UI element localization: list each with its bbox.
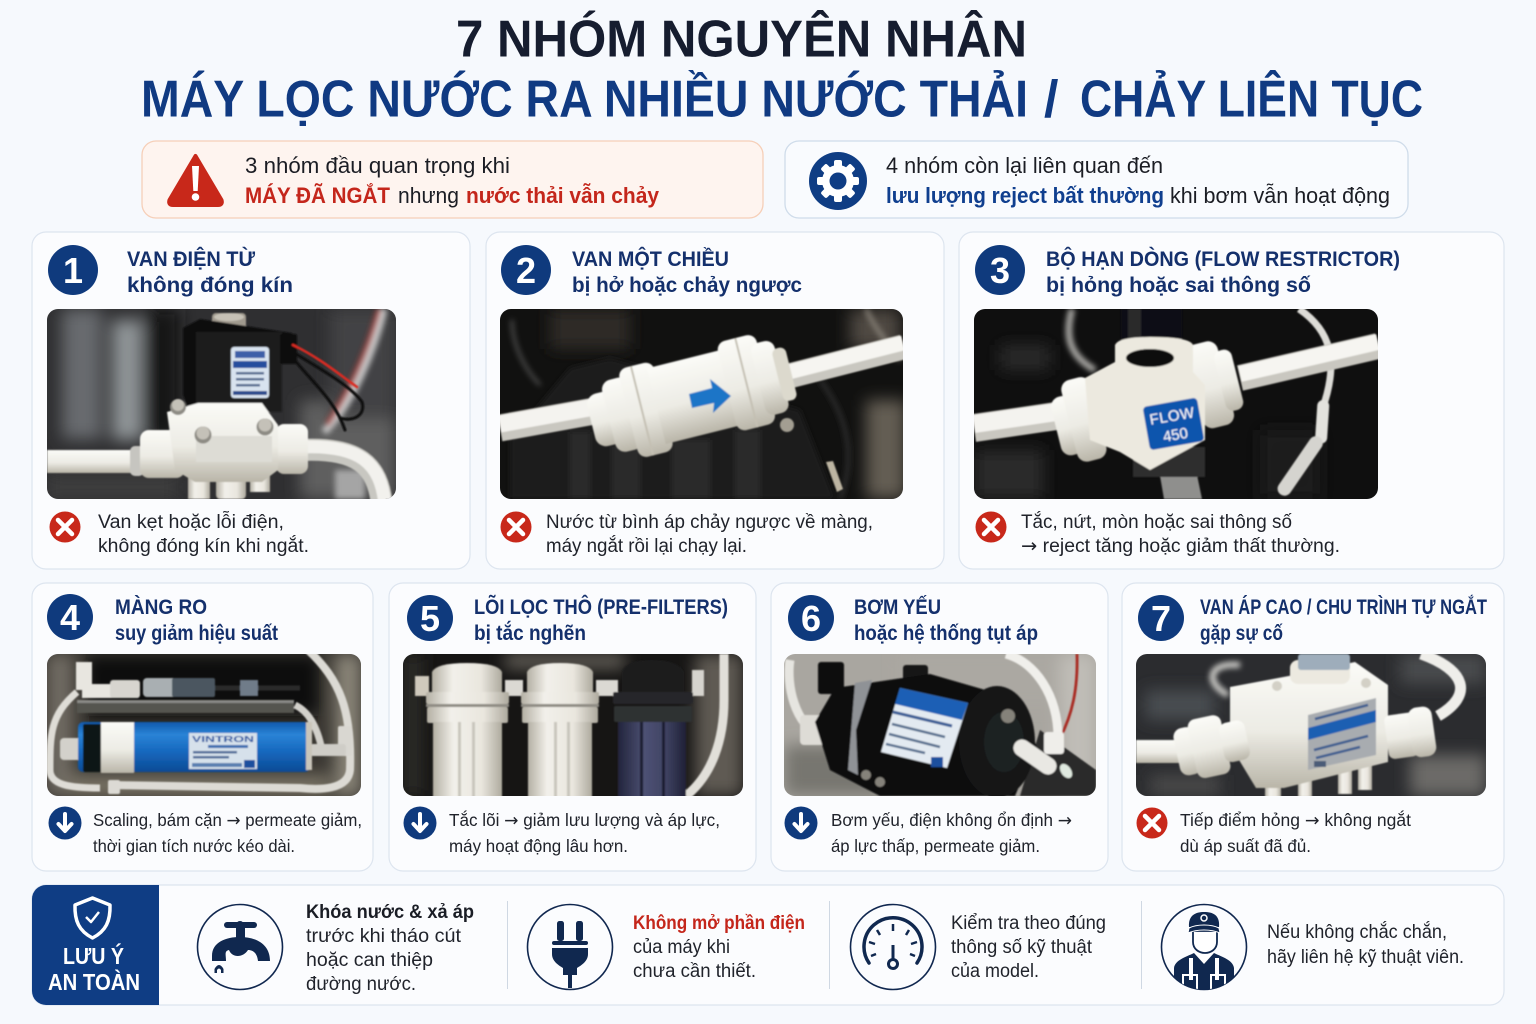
number badge 3: 3 (990, 250, 1010, 291)
heading 6: hoặc hệ thống tụt áp (854, 622, 1038, 645)
photo: check valve (500, 309, 906, 499)
heading 2 (572, 247, 802, 297)
icon: warning triangle (169, 156, 222, 205)
panel: cause 3 (959, 232, 1504, 569)
panel: cause 6 (771, 583, 1108, 871)
panel: cause 2 (486, 232, 944, 569)
description 3: → reject tăng hoặc giảm thất thường. (1021, 535, 1340, 557)
description 3: Tắc, nứt, mòn hoặc sai thông số (1021, 511, 1292, 533)
panel: cause 5 (389, 583, 756, 871)
safety note 4: Nếu không chắc chắn, (1267, 921, 1447, 943)
number badge 4 (47, 594, 93, 640)
description 6: áp lực thấp, permeate giảm. (831, 836, 1040, 856)
number badge 6 (788, 595, 834, 641)
safety note 1 (306, 902, 474, 995)
heading 3: BỘ HẠN DÒNG (FLOW RESTRICTOR) (1046, 247, 1400, 271)
safety note 3: Kiểm tra theo đúng (951, 913, 1106, 934)
title: MÁY LỌC NƯỚC RA NHIỀU NƯỚC THẢI (141, 70, 1028, 128)
description 3 (1021, 511, 1340, 557)
safety note 4: hãy liên hệ kỹ thuật viên. (1267, 947, 1464, 968)
heading 3: bị hỏng hoặc sai thông số (1046, 274, 1311, 297)
number badge 2: 2 (516, 250, 536, 291)
icon: down arrow (404, 806, 436, 840)
number badge 4: 4 (60, 597, 80, 638)
description 2 (546, 512, 873, 557)
safety note 3 (951, 913, 1106, 982)
heading 4: suy giảm hiệu suất (115, 622, 278, 645)
description 5: máy hoạt động lâu hơn. (449, 836, 628, 856)
callout text: 4 nhóm còn lại liên quan đến (886, 153, 1163, 178)
icon: gear (809, 152, 867, 210)
description 7: dù áp suất đã đủ. (1180, 836, 1311, 856)
panel: cause 4 (32, 583, 373, 871)
heading 1: không đóng kín (127, 274, 293, 297)
panel: cause 7 (1122, 583, 1504, 871)
title: 7 NHÓM NGUYÊN NHÂN (456, 10, 1027, 68)
icon: red cross (500, 512, 532, 542)
icon: gauge (850, 904, 936, 990)
description 6: Bơm yếu, điện không ổn định → (831, 810, 1072, 831)
number badge 5: 5 (420, 598, 440, 639)
number badge 2 (501, 245, 551, 295)
safety note 3: thông số kỹ thuật (951, 937, 1093, 958)
callout: remaining 4 groups (785, 141, 1408, 218)
number badge 5 (407, 595, 453, 641)
description 4 (93, 810, 362, 856)
icon: down arrow (784, 806, 818, 840)
safety note 3: của model. (951, 961, 1039, 982)
photo: flow restrictor: 450 (1162, 425, 1189, 446)
callout text: nhưng (398, 183, 459, 208)
number badge 1 (48, 245, 98, 295)
title (141, 10, 1423, 128)
heading 5: bị tắc nghẽn (474, 621, 586, 645)
safety note 1: hoặc can thiệp (306, 950, 433, 971)
icon: water tap (198, 904, 282, 990)
safety note 1: Khóa nước & xả áp (306, 902, 474, 923)
icon: shield (75, 898, 110, 938)
safety label text: LƯU Ý (63, 942, 124, 969)
title: / (1044, 70, 1058, 128)
photo: solenoid valve (47, 309, 396, 505)
safety note 2: chưa cần thiết. (633, 961, 756, 982)
icon: technician (1162, 904, 1246, 995)
heading 1 (127, 247, 293, 297)
heading 2: VAN MỘT CHIỀU (572, 247, 729, 271)
heading 6 (854, 596, 1038, 645)
heading 5: LÕI LỌC THÔ (PRE-FILTERS) (474, 595, 728, 619)
panel: cause 1 (32, 232, 470, 569)
description 1: không đóng kín khi ngắt. (98, 535, 309, 557)
callout text (245, 153, 660, 208)
heading 6: BƠM YẾU (854, 596, 941, 619)
photo: flow restrictor: FLOW (1148, 404, 1196, 429)
icon: red cross (1136, 808, 1168, 838)
description 6 (831, 810, 1072, 856)
safety note 1: đường nước. (306, 974, 416, 995)
number badge 7 (1138, 595, 1184, 641)
title: CHẢY LIÊN TỤC (1080, 70, 1423, 128)
photo: booster pump (784, 654, 1096, 798)
description 1 (98, 511, 309, 557)
callout text: khi bơm vẫn hoạt động (1170, 183, 1390, 208)
photo: RO membrane: VINTRON (192, 734, 254, 744)
icon: red cross (50, 512, 80, 542)
description 5: Tắc lõi → giảm lưu lượng và áp lực, (449, 809, 720, 831)
number badge 1: 1 (63, 250, 83, 291)
number badge 3 (975, 245, 1025, 295)
heading 1: VAN ĐIỆN TỪ (127, 247, 256, 271)
safety note 1: trước khi tháo cút (306, 926, 462, 947)
callout text: nước thải vẫn chảy (466, 183, 660, 208)
icon: plug (528, 904, 612, 990)
safety label text: AN TOÀN (48, 968, 140, 995)
description 4: thời gian tích nước kéo dài. (93, 836, 295, 856)
safety note 2: của máy khi (633, 937, 730, 958)
number badge 7: 7 (1151, 598, 1171, 639)
heading 4: MÀNG RO (115, 596, 207, 619)
callout: first 3 groups (142, 141, 763, 218)
safety note 2: Không mở phần điện (633, 913, 805, 934)
callout text: MÁY ĐÃ NGẮT (245, 183, 391, 208)
panel: safety notes (32, 885, 1504, 1005)
heading 2: bị hở hoặc chảy ngược (572, 274, 802, 297)
description 7: Tiếp điểm hỏng → không ngắt (1180, 809, 1411, 831)
description 1: Van kẹt hoặc lỗi điện, (98, 511, 284, 533)
description 2: Nước từ bình áp chảy ngược về màng, (546, 512, 873, 533)
heading 5 (474, 595, 728, 645)
callout text: 3 nhóm đầu quan trọng khi (245, 153, 510, 178)
callout text (886, 153, 1390, 208)
description 7 (1180, 809, 1411, 856)
callout text: lưu lượng reject bất thường (886, 183, 1164, 208)
photo: high-pressure switch (1136, 654, 1486, 799)
safety note 2 (633, 913, 805, 982)
heading 4 (115, 596, 278, 645)
safety label block (32, 885, 159, 1005)
description 4: Scaling, bám cặn → permeate giảm, (93, 810, 362, 831)
icon: red cross (976, 512, 1006, 542)
photo: pre-filter housings (403, 654, 743, 802)
photo: RO membrane (47, 650, 361, 796)
photo: flow restrictor (974, 309, 1378, 499)
heading 7 (1200, 595, 1487, 645)
icon: down arrow (48, 806, 82, 840)
safety note 4 (1267, 921, 1464, 968)
number badge 6: 6 (801, 598, 821, 639)
description 2: máy ngắt rồi lại chạy lại. (546, 535, 747, 557)
safety label text (48, 942, 140, 995)
heading 3 (1046, 247, 1400, 297)
description 5 (449, 809, 720, 856)
heading 7: gặp sự cố (1200, 622, 1283, 645)
